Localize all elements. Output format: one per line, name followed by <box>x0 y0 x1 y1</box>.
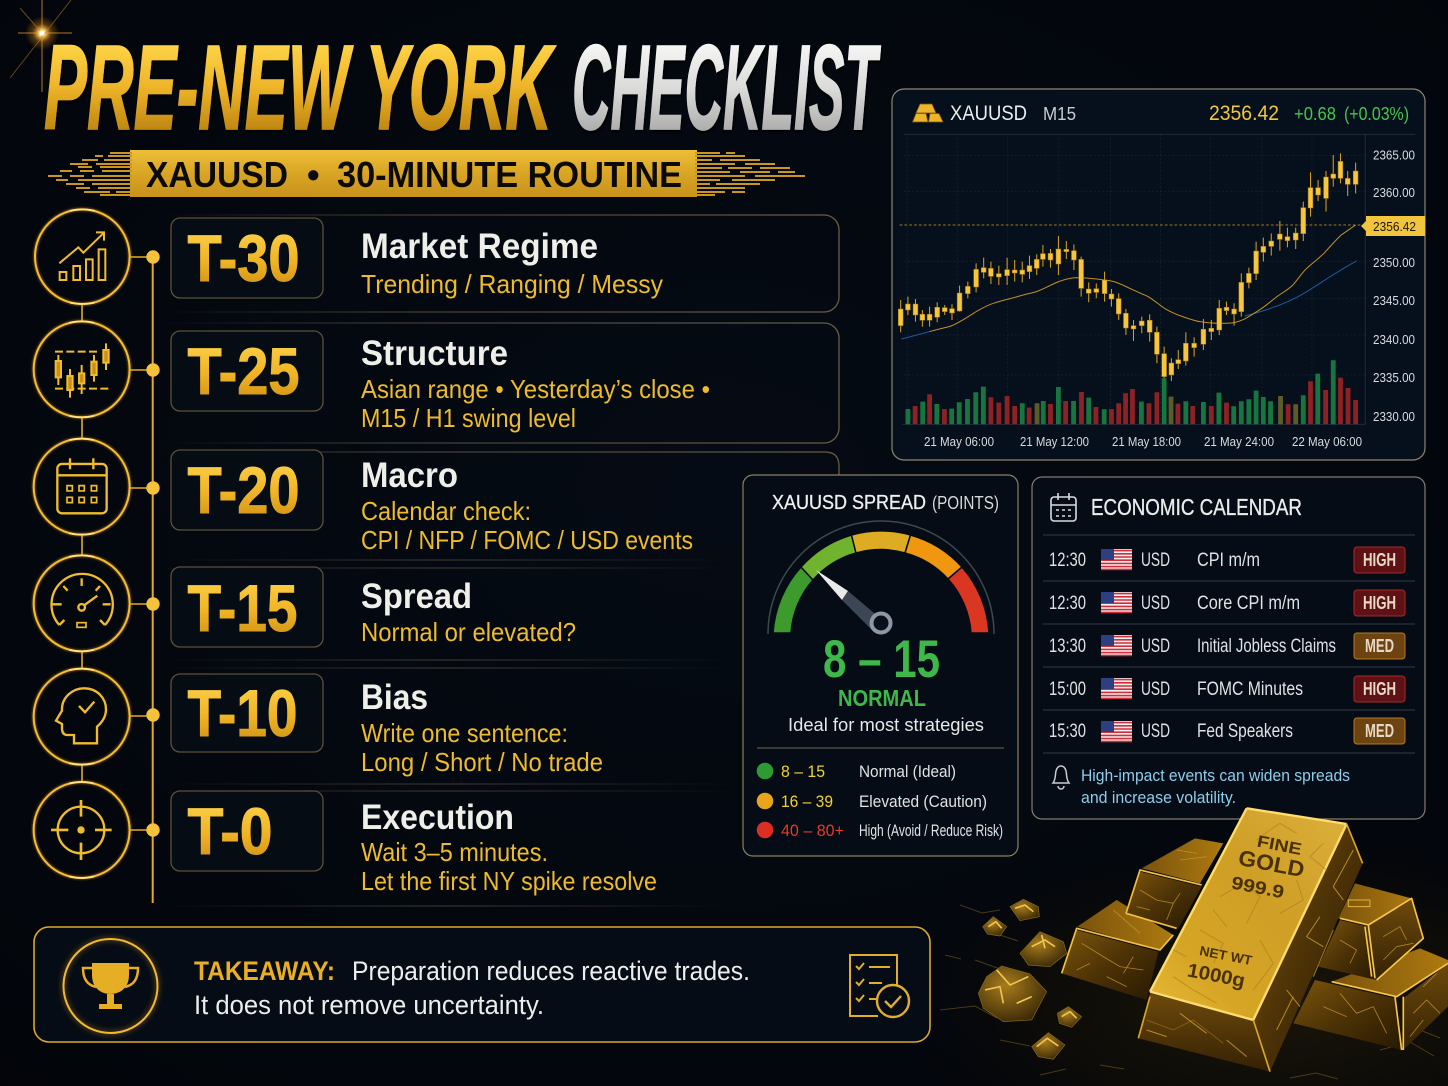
icon: bell <box>1053 766 1069 789</box>
badge <box>171 567 323 647</box>
calendar row: Core CPI: Core CPI m/m <box>1197 593 1300 614</box>
step T-15 <box>34 555 576 651</box>
time axis: 21 May 12:00 <box>1020 435 1089 449</box>
gauge <box>768 521 994 634</box>
bar engraving <box>1185 832 1307 992</box>
step T-25 <box>34 321 710 433</box>
step T-20: Macro <box>361 456 458 495</box>
calendar heading: ECONOMIC CALENDAR <box>1091 494 1302 520</box>
calendar row: Jobless Claims: MED <box>1365 636 1394 656</box>
calendar row: Jobless Claims <box>1049 633 1405 659</box>
step T-20: Calendar check: <box>361 496 531 526</box>
title: gold part: PRE-NEW YORK <box>44 19 556 155</box>
step T-30: Market Regime <box>361 227 598 266</box>
takeaway text <box>194 956 750 1020</box>
step T-20: T-20 <box>188 453 300 527</box>
calendar row: Jobless Claims: Initial Jobless Claims <box>1197 636 1336 657</box>
calendar row: Jobless Claims: USD <box>1141 636 1170 657</box>
calendar row: Fed Speakers: Fed Speakers <box>1197 721 1293 742</box>
ground surface <box>930 850 1448 1086</box>
calendar row: CPI: CPI m/m <box>1197 550 1260 571</box>
badge <box>171 331 323 411</box>
status note: Ideal for most strategies <box>788 715 984 735</box>
calendar note: High-impact events can widen spreads <box>1081 766 1350 785</box>
panel: economic calendar <box>1032 477 1425 819</box>
time axis: 21 May 18:00 <box>1112 435 1181 449</box>
gold bar: upper right <box>1318 883 1423 980</box>
calendar row: Jobless Claims: 13:30 <box>1049 636 1086 657</box>
takeaway text: TAKEAWAY: <box>194 956 335 986</box>
gold bar: main <box>1138 808 1363 1072</box>
banner text <box>146 154 682 195</box>
price axis <box>1361 148 1425 424</box>
step T-25: T-25 <box>188 334 300 408</box>
calendar row: CPI: 12:30 <box>1049 550 1086 571</box>
calendar row: FOMC: HIGH <box>1363 679 1396 699</box>
time axis: 21 May 24:00 <box>1204 435 1274 449</box>
price axis: 2345.00 <box>1373 294 1415 308</box>
price axis: 2356.42 <box>1373 219 1416 234</box>
panel: spread gauge <box>743 475 1018 856</box>
calendar row: Core CPI: HIGH <box>1363 593 1396 613</box>
icon: speedometer <box>34 555 130 651</box>
chart header: (+0.03%) <box>1344 104 1409 124</box>
step T-10: Bias <box>361 678 428 717</box>
text: CHECKLIST <box>572 19 881 155</box>
step T-15: Spread <box>361 577 472 616</box>
step T-30 <box>35 209 663 304</box>
calendar row: Fed Speakers: 15:30 <box>1049 721 1086 742</box>
bar engraving: FINE <box>1255 832 1303 859</box>
row panel outlines <box>156 215 839 906</box>
gold bars <box>1062 808 1448 1072</box>
price axis: 2340.00 <box>1373 333 1415 347</box>
spread legend: Elevated (Caution) <box>859 792 987 811</box>
chart header: XAUUSD <box>950 102 1027 125</box>
step T-10: Write one sentence: <box>361 718 568 748</box>
step T-20 <box>34 439 693 555</box>
calendar row: FOMC: USD <box>1141 679 1170 700</box>
calendar row: FOMC <box>1049 676 1405 702</box>
status: NORMAL <box>838 685 926 711</box>
bar engraving: 999.9 <box>1230 873 1286 902</box>
spread legend: 16 – 39 <box>781 792 833 811</box>
calendar note: and increase volatility. <box>1081 788 1236 807</box>
step T-0: Let the first NY spike resolve <box>361 866 657 896</box>
icon: target crosshair <box>34 782 130 878</box>
badge <box>171 674 323 752</box>
gold bar: lower left <box>1062 900 1173 1000</box>
bar engraving: GOLD <box>1236 845 1307 882</box>
step T-10: Long / Short / No trade <box>361 747 603 777</box>
calendar row: FOMC: 15:00 <box>1049 679 1086 700</box>
time axis: 22 May 06:00 <box>1292 435 1362 449</box>
icon: candlesticks <box>34 321 130 417</box>
title <box>44 19 881 155</box>
calendar note <box>1081 766 1350 807</box>
candles <box>898 153 1358 381</box>
step T-30: Trending / Ranging / Messy <box>361 269 663 299</box>
badge <box>171 791 323 871</box>
calendar row: Core CPI: USD <box>1141 593 1170 614</box>
price axis: 2360.00 <box>1373 186 1415 200</box>
calendar row: Fed Speakers: USD <box>1141 721 1170 742</box>
takeaway banner <box>34 927 930 1042</box>
gold nuggets <box>978 899 1082 1059</box>
spread heading: (POINTS) <box>932 493 999 513</box>
banner text: XAUUSD <box>146 154 288 195</box>
icon: calendar small <box>1051 493 1076 521</box>
subtitle banner <box>48 150 805 197</box>
spread legend: 40 – 80+ <box>781 821 844 840</box>
needle <box>816 570 848 600</box>
icon: rising chart <box>35 209 130 304</box>
step T-15: Normal or elevated? <box>361 617 576 647</box>
icon: checklist <box>850 955 909 1017</box>
step T-25: Structure <box>361 334 508 373</box>
timeline spine <box>82 257 153 903</box>
price axis: 2365.00 <box>1373 148 1415 162</box>
sparkle <box>10 0 72 92</box>
step T-10 <box>34 669 603 777</box>
step T-0: Execution <box>361 798 514 837</box>
step T-0 <box>34 782 657 896</box>
bar engraving: NET WT <box>1198 943 1253 968</box>
time axis <box>924 435 1362 449</box>
chart header <box>950 102 1409 125</box>
calendar row: CPI <box>1049 547 1405 573</box>
icon: trophy <box>64 939 158 1033</box>
step T-25: M15 / H1 swing level <box>361 403 576 433</box>
icon: calendar <box>34 439 130 535</box>
spread legend: Normal (Ideal) <box>859 762 956 781</box>
moving averages <box>901 225 1357 339</box>
price axis: 2350.00 <box>1373 256 1415 270</box>
chart header: M15 <box>1043 104 1076 124</box>
step T-10: T-10 <box>188 676 298 750</box>
time axis: 21 May 06:00 <box>924 435 994 449</box>
volume bars <box>905 360 1358 424</box>
panel: chart <box>892 89 1425 460</box>
chart header: +0.68 <box>1294 104 1336 124</box>
step T-15: T-15 <box>188 571 298 645</box>
icon: head with check <box>34 669 130 765</box>
takeaway text: Preparation reduces reactive trades. <box>352 956 750 986</box>
calendar row: Core CPI <box>1049 590 1405 616</box>
takeaway text: It does not remove uncertainty. <box>194 990 544 1020</box>
chart header: 2356.42 <box>1209 102 1279 125</box>
price axis: 2330.00 <box>1373 410 1415 424</box>
texture <box>1147 823 1327 1043</box>
step T-0: Wait 3–5 minutes. <box>361 837 548 867</box>
banner text: 30-MINUTE ROUTINE <box>337 154 682 195</box>
step T-25: Asian range • Yesterday’s close • <box>361 374 710 404</box>
icon: gold bars <box>912 104 943 122</box>
gold bar: upper left <box>1126 838 1223 928</box>
spread legend <box>757 762 1003 840</box>
bar engraving: 1000g <box>1185 960 1247 992</box>
calendar row: FOMC: FOMC Minutes <box>1197 679 1303 700</box>
calendar row: CPI: HIGH <box>1363 550 1396 570</box>
spread legend: High (Avoid / Reduce Risk) <box>859 821 1003 840</box>
badge <box>171 218 323 298</box>
candlestick chart <box>898 134 1415 424</box>
spread legend: 8 – 15 <box>781 762 825 781</box>
step T-20: CPI / NFP / FOMC / USD events <box>361 525 693 555</box>
price axis: 2335.00 <box>1373 371 1415 385</box>
calendar row: CPI: USD <box>1141 550 1170 571</box>
step T-0: T-0 <box>188 794 272 868</box>
spread value: 8 – 15 <box>823 630 940 689</box>
calendar row: Fed Speakers <box>1049 718 1405 744</box>
gold bar: lower right <box>1293 948 1448 1050</box>
step T-30: T-30 <box>188 221 300 295</box>
calendar row: Core CPI: 12:30 <box>1049 593 1086 614</box>
calendar row: Fed Speakers: MED <box>1365 721 1394 741</box>
badge <box>171 450 323 530</box>
banner text: • <box>307 154 320 195</box>
spread heading: XAUUSD SPREAD <box>772 492 926 514</box>
